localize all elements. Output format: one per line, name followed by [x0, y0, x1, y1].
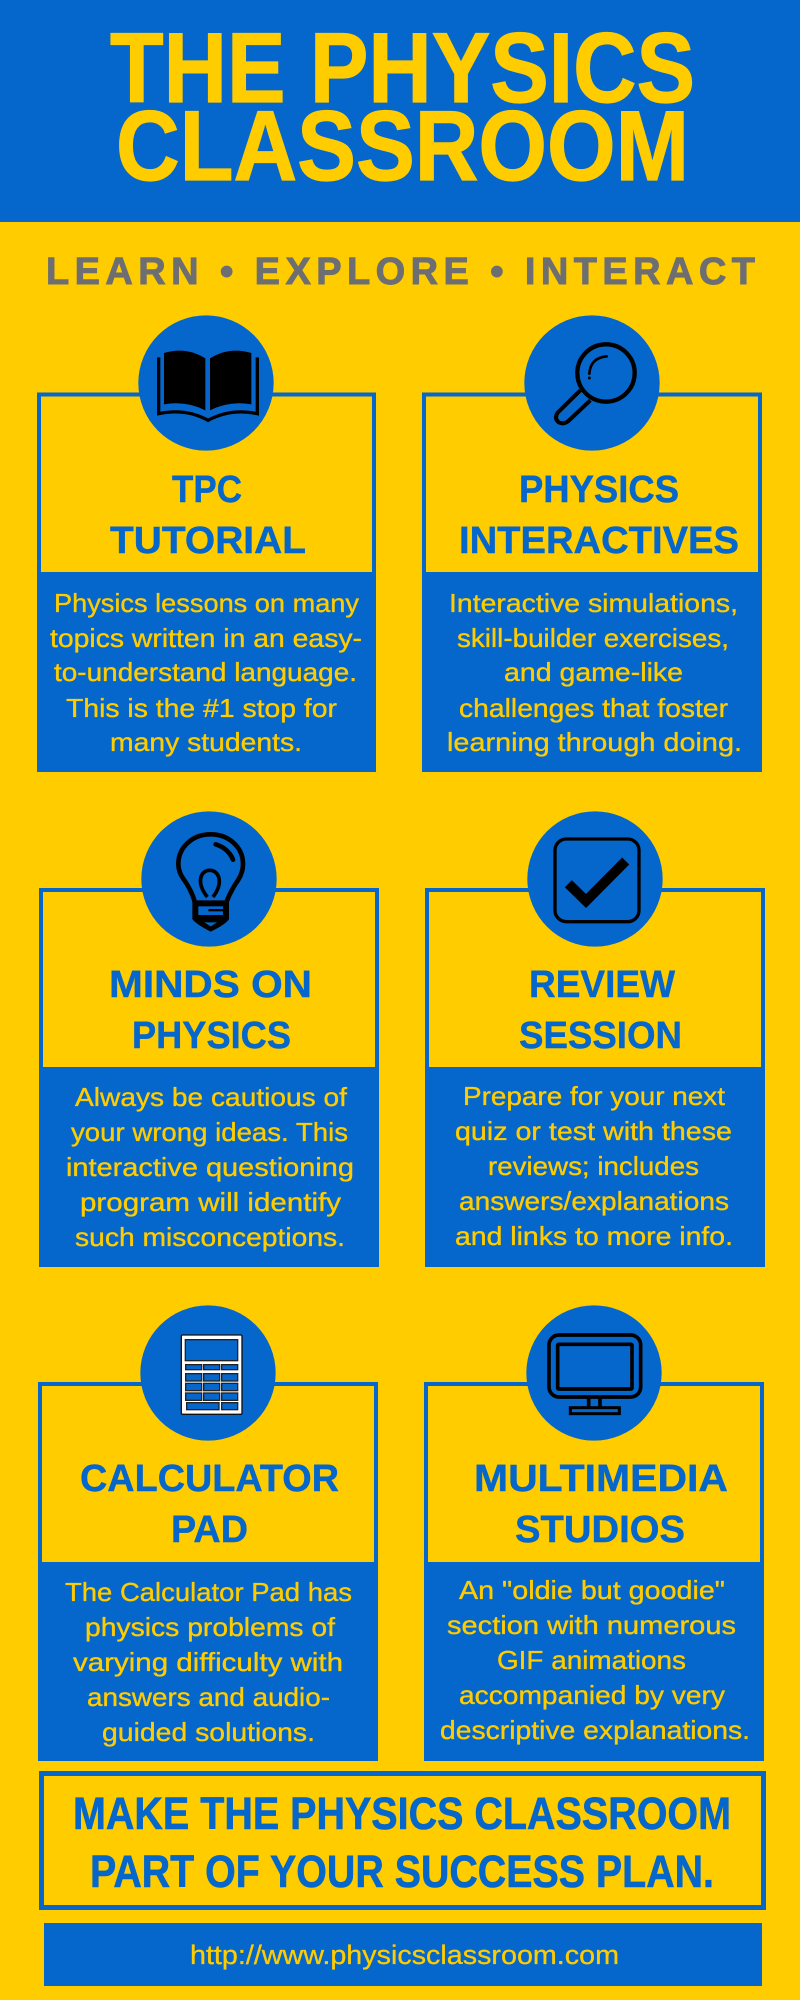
- heading: REVIEW: [529, 964, 675, 1006]
- description: and game-like: [504, 657, 683, 687]
- callout: call to action: PART OF YOUR SUCCESS PLAN.: [90, 1846, 714, 1897]
- website link bar: [44, 1923, 762, 1986]
- heading: [109, 964, 312, 1057]
- description: challenges that foster: [459, 693, 728, 723]
- heading: MULTIMEDIA: [474, 1458, 728, 1500]
- heading: [474, 1458, 728, 1551]
- icon: check box: [527, 811, 663, 947]
- description: many students.: [110, 727, 302, 757]
- panel: Multimedia Studios: [424, 1305, 764, 1761]
- description: This is the #1 stop for: [66, 693, 337, 723]
- description: [50, 588, 362, 757]
- title: CLASSROOM: [116, 90, 689, 201]
- icon: computer monitor: [526, 1305, 662, 1441]
- heading: PHYSICS: [519, 469, 679, 511]
- heading: STUDIOS: [515, 1509, 685, 1551]
- heading: TPC: [172, 469, 242, 511]
- heading: [459, 469, 739, 562]
- title: [110, 12, 695, 201]
- description: GIF animations: [497, 1645, 686, 1675]
- description: Always be cautious of: [75, 1082, 348, 1112]
- heading: MINDS ON: [109, 964, 312, 1006]
- header banner: [0, 0, 800, 222]
- description: Physics lessons on many: [54, 588, 359, 618]
- description: An "oldie but goodie": [459, 1575, 725, 1605]
- description: such misconceptions.: [75, 1222, 345, 1252]
- description: answers/explanations: [459, 1186, 729, 1216]
- description: and links to more info.: [455, 1221, 733, 1251]
- description: varying difficulty with: [73, 1647, 343, 1677]
- icon: open book: [138, 315, 274, 451]
- panel: Calculator Pad: [38, 1305, 378, 1761]
- description: answers and audio-: [87, 1682, 330, 1712]
- heading: CALCULATOR: [80, 1458, 339, 1500]
- description: descriptive explanations.: [440, 1715, 750, 1745]
- heading: [519, 964, 682, 1057]
- description: [440, 1575, 750, 1745]
- callout: call to action: [42, 1774, 764, 1908]
- description: section with numerous: [447, 1610, 736, 1640]
- description: interactive questioning: [66, 1152, 354, 1182]
- panel: Minds On Physics: [39, 811, 379, 1267]
- heading: [80, 1458, 339, 1551]
- website link bar: http://www.physicsclassroom.com: [190, 1940, 619, 1970]
- description: Interactive simulations,: [449, 588, 738, 618]
- description: [66, 1082, 354, 1252]
- icon: light bulb: [141, 811, 277, 947]
- heading: [110, 469, 306, 562]
- description: [65, 1577, 352, 1747]
- description: The Calculator Pad has: [65, 1577, 352, 1607]
- description: to-understand language.: [54, 657, 357, 687]
- panel: Review Session: [425, 811, 765, 1267]
- description: accompanied by very: [459, 1680, 725, 1710]
- icon: magnifying glass: [524, 315, 660, 451]
- heading: PHYSICS: [132, 1015, 291, 1057]
- description: guided solutions.: [102, 1717, 315, 1747]
- description: quiz or test with these: [455, 1116, 732, 1146]
- description: learning through doing.: [447, 727, 742, 757]
- description: reviews; includes: [488, 1151, 699, 1181]
- icon: calculator: [140, 1305, 276, 1441]
- description: Prepare for your next: [463, 1081, 726, 1111]
- description: [455, 1081, 733, 1251]
- tagline: LEARN • EXPLORE • INTERACT: [46, 251, 755, 293]
- panel: TPC Tutorial: [37, 315, 376, 772]
- description: topics written in an easy-: [50, 623, 362, 653]
- description: your wrong ideas. This: [71, 1117, 348, 1147]
- panel: Physics Interactives: [422, 315, 762, 772]
- description: [447, 588, 742, 757]
- heading: INTERACTIVES: [459, 520, 739, 562]
- description: skill-builder exercises,: [457, 623, 729, 653]
- description: program will identify: [80, 1187, 341, 1217]
- heading: TUTORIAL: [110, 520, 306, 562]
- heading: SESSION: [519, 1015, 682, 1057]
- heading: PAD: [171, 1509, 248, 1551]
- title: THE PHYSICS: [110, 12, 695, 123]
- description: physics problems of: [85, 1612, 336, 1642]
